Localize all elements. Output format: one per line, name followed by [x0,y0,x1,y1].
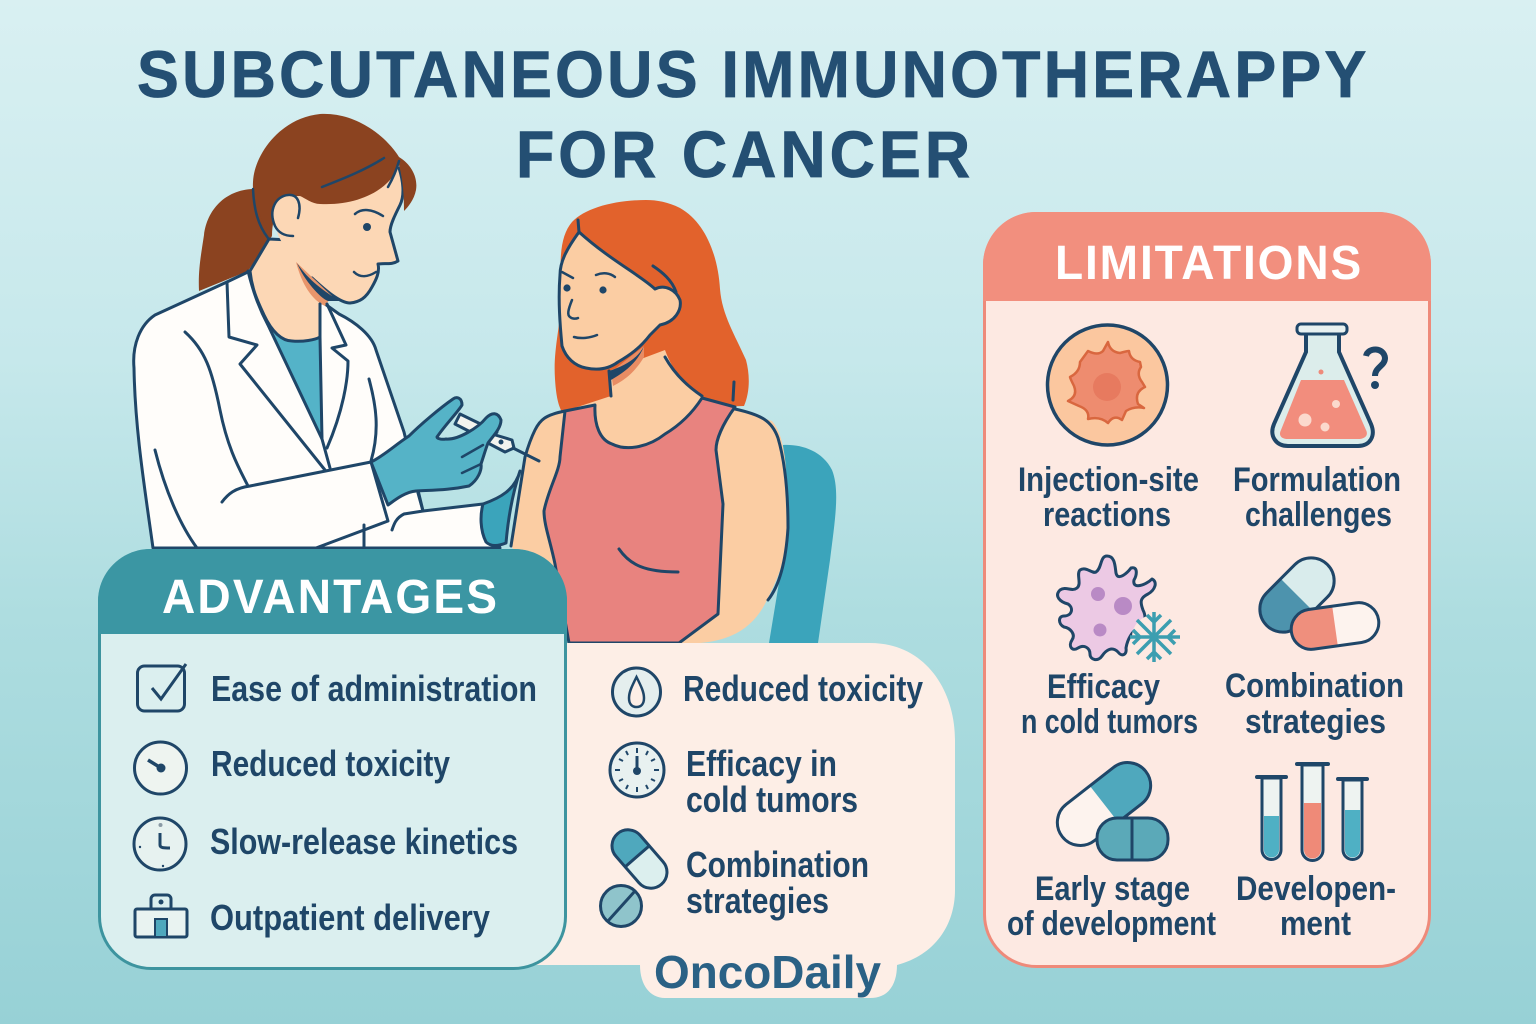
item: ease of administration: Ease of administration [211,668,537,709]
item: efficacy in cold tumors: n cold tumors [1021,703,1198,741]
title: SUBCUTANEOUS IMMUNOTHERAPPY [137,38,1366,111]
coat [134,271,500,548]
item: combination strategies: Combination [1225,667,1404,705]
doctor neck [250,239,330,341]
item: outpatient delivery: Outpatient delivery [210,897,490,938]
doctor ear [273,195,306,234]
item: outpatient delivery [135,895,490,938]
second glove [481,471,520,546]
item: injection-site reactions [1018,325,1199,534]
item: combination strategies [1225,548,1404,741]
patient hair [555,200,749,412]
item: injection-site reactions: reactions [1043,496,1171,534]
patient top [544,398,735,643]
item: development [1236,764,1396,943]
logo: OncoDaily [654,946,881,998]
advantages heading: ADVANTAGES [162,569,497,623]
item: injection-site reactions: Injection-site [1018,461,1199,499]
illustration: doctor [134,114,539,548]
patient neck and arms [511,350,788,643]
patient neck shadow [611,346,644,386]
item: development: ment [1280,905,1351,943]
item: formulation challenges [1233,324,1401,534]
item: early stage of development: Early stage [1035,870,1190,908]
main glove [371,398,501,505]
doctor eye and mouth [354,210,383,276]
item: efficacy in cold tumors: Efficacy in [686,743,837,784]
item: ease of administration [138,664,537,711]
item: slow-release kinetics: Slow-release kinetics [210,821,518,862]
coat lapels and folds [155,271,376,548]
item: combination strategies [600,823,869,926]
jaw shadow [296,262,332,306]
item: efficacy in cold tumors [610,743,858,820]
item: formulation challenges: challenges [1245,496,1392,534]
item: formulation challenges: Formulation [1233,461,1401,499]
item: combination strategies: strategies [686,880,829,921]
limitations header [983,212,1431,301]
item: efficacy in cold tumors [1021,556,1198,741]
ponytail [199,189,272,291]
peach panel: extra benefits [520,643,955,998]
syringe [455,414,497,442]
limitations heading: LIMITATIONS [1055,235,1361,289]
item: combination strategies: Combination [686,844,869,885]
panel: advantages [98,549,567,968]
title: FOR CANCER [516,118,970,191]
doctor face [270,168,403,303]
item: reduced toxicity: Reduced toxicity [211,743,450,784]
scrub shirt [262,314,322,439]
coat sleeve [222,462,423,548]
panel: limitations [983,212,1431,966]
advantages header [98,549,567,634]
item: combination strategies: strategies [1245,703,1386,741]
item: efficacy in cold tumors: Efficacy [1047,668,1160,706]
patient eyes and mouth [562,272,615,338]
item: early stage of development [1007,753,1216,943]
title [137,38,1366,191]
item: efficacy in cold tumors: cold tumors [686,779,858,820]
item: slow-release kinetics [134,818,518,870]
doctor hair [253,114,416,236]
item: early stage of development: of development [1007,905,1216,943]
illustration: patient [511,200,836,643]
patient face [559,232,680,369]
item: reduced toxicity [134,742,450,794]
item: reduced toxicity: Reduced toxicity [683,668,923,709]
chair [769,445,836,643]
item: development: Developen- [1236,870,1396,908]
item: reduced toxicity [612,668,923,716]
